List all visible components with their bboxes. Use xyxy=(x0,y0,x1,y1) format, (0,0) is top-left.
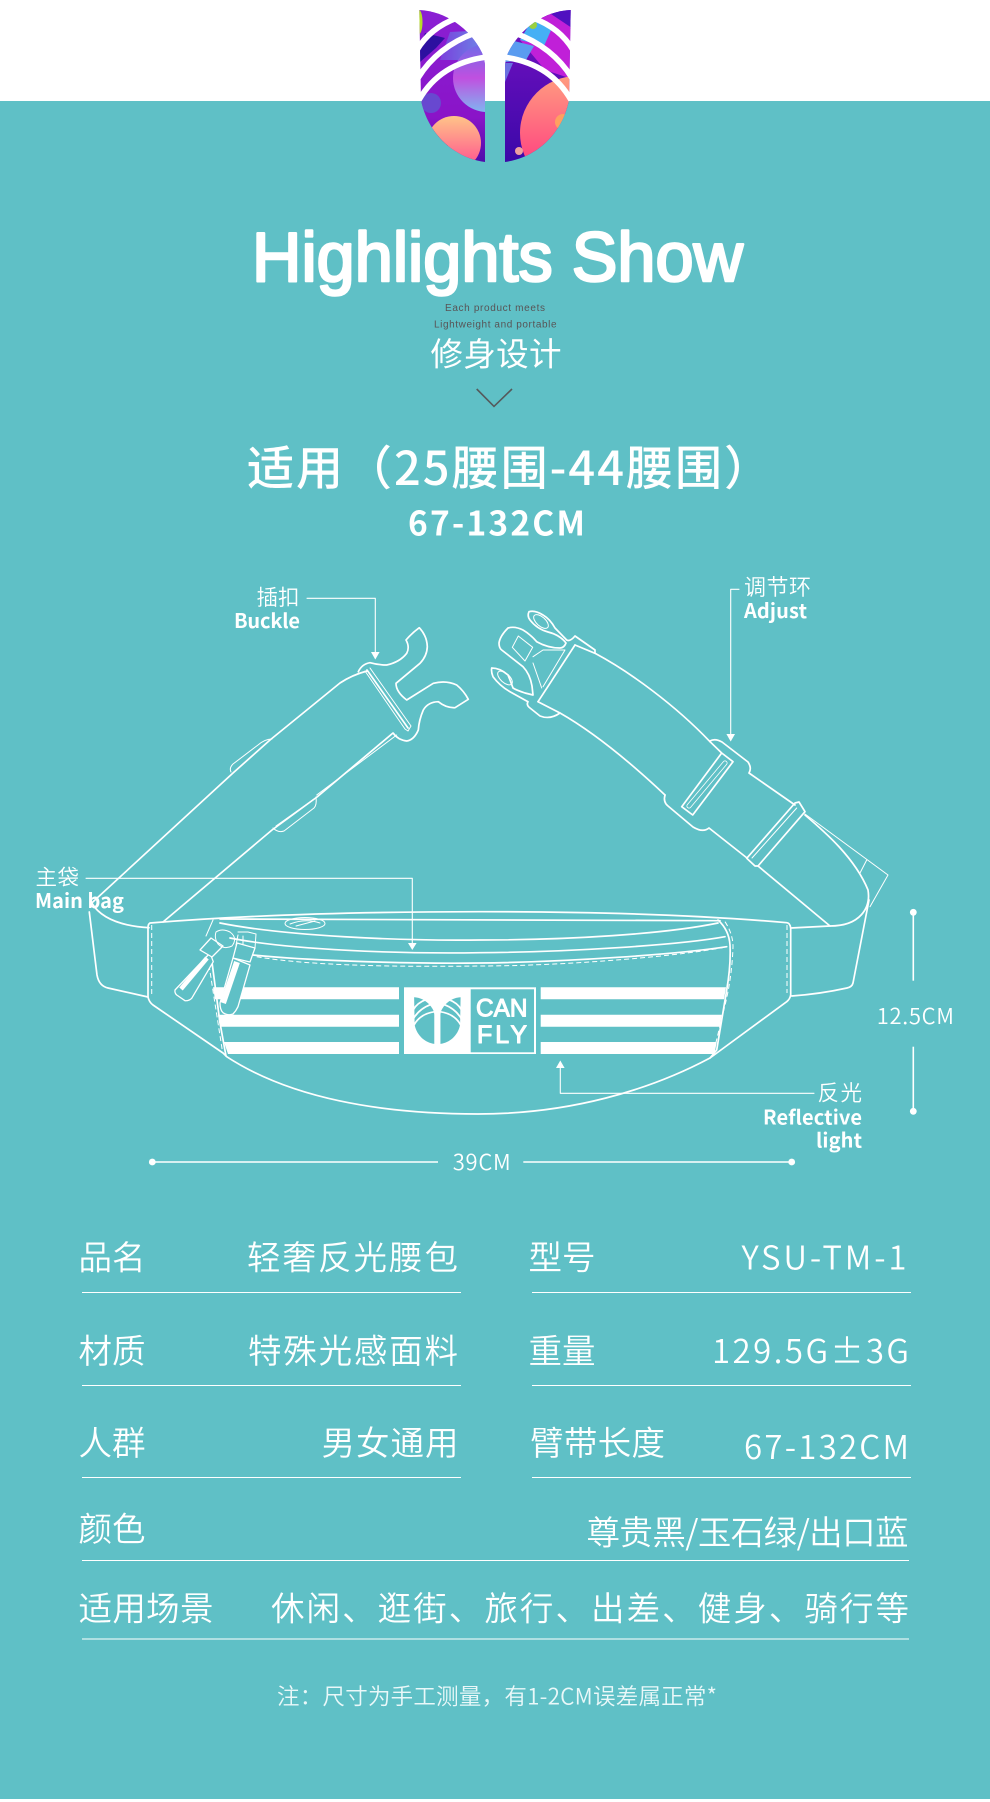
spec row: product name: 轻奢反光腰包 xyxy=(247,1230,458,1280)
callout: adjust: Adjust xyxy=(743,595,808,624)
spec row: colours: 尊贵黑/玉石绿/出口蓝 xyxy=(586,1506,908,1554)
spec row: product name: 品名 xyxy=(78,1230,146,1280)
spec row: strap length: 臂带长度 xyxy=(530,1416,665,1465)
spec row: weight: 重量 xyxy=(528,1324,596,1373)
spec row: product name xyxy=(78,1230,461,1292)
left buckle xyxy=(358,628,468,741)
icon: brand logo xyxy=(419,10,571,162)
brand patch xyxy=(404,987,536,1054)
spec row: weight xyxy=(528,1324,911,1386)
spec row: use cases: 适用场景 xyxy=(78,1582,214,1630)
callout: reflective light: light xyxy=(816,1125,863,1154)
subtitle: each product meets: Each product meets xyxy=(445,303,545,314)
subtitle: each product meets: Lightweight and portable xyxy=(434,320,557,330)
spec row: strap length xyxy=(530,1416,911,1478)
spec row: weight: 129.5G±3G xyxy=(712,1325,909,1373)
zipper pulls xyxy=(175,920,256,1015)
left strap xyxy=(89,671,397,997)
spec row: material: 材质 xyxy=(78,1324,146,1373)
spec row: model: YSU-TM-1 xyxy=(742,1232,906,1280)
subtitle: each product meets xyxy=(434,303,557,330)
spec row: audience: 人群 xyxy=(78,1416,146,1465)
reflective stripes xyxy=(213,987,726,1054)
spec table xyxy=(78,1230,911,1639)
bag body xyxy=(148,912,791,1114)
callout: reflective light: 反光 xyxy=(818,1076,862,1108)
callout: buckle: 插扣 xyxy=(256,581,300,612)
icon: chevron down xyxy=(477,389,512,406)
callout: buckle: Buckle xyxy=(234,605,300,634)
dimension: height: 12.5CM xyxy=(877,999,954,1031)
callout: reflective light xyxy=(556,1060,863,1154)
spec row: strap length: 67-132CM xyxy=(744,1421,909,1469)
footnote: 注：尺寸为手工测量，有1-2CM误差属正常* xyxy=(277,1680,717,1712)
callout: main bag: Main bag xyxy=(35,885,124,914)
callout: reflective light: Reflective xyxy=(763,1101,862,1130)
heading: centimetre range: 67-132CM xyxy=(408,497,585,546)
callout: buckle xyxy=(234,581,380,660)
callout: adjust: 调节环 xyxy=(744,570,811,602)
spec row: model xyxy=(528,1230,911,1292)
spec row: use cases: 休闲、逛街、旅行、出差、健身、骑行等 xyxy=(271,1582,909,1630)
diagram: waist bag line drawing xyxy=(89,611,888,1114)
brand patch: FLY xyxy=(477,1021,527,1049)
heading: waist range: 适用（25腰围-44腰围） xyxy=(247,430,771,499)
spec row: colours: 颜色 xyxy=(78,1502,146,1551)
dimension: width xyxy=(149,1145,795,1177)
spec row: material: 特殊光感面料 xyxy=(248,1324,458,1373)
callout: adjust xyxy=(726,570,811,742)
spec row: audience: 男女通用 xyxy=(322,1416,458,1465)
callout: main bag xyxy=(35,861,417,950)
spec row: use cases xyxy=(78,1582,909,1639)
dimension: width: 39CM xyxy=(453,1145,511,1177)
spec row: audience xyxy=(78,1416,461,1478)
right buckle xyxy=(492,611,595,717)
title: Highlights Show: Highlights Show xyxy=(252,218,743,296)
spec row: colours xyxy=(78,1502,909,1560)
callout: main bag: 主袋 xyxy=(36,861,79,892)
right strap with adjuster xyxy=(538,645,888,996)
spec row: model: 型号 xyxy=(528,1230,596,1280)
spec row: material xyxy=(78,1324,461,1386)
brand patch: CAN xyxy=(476,995,528,1023)
dimension: height xyxy=(877,909,954,1115)
pouch side seams xyxy=(209,920,733,1058)
heading: slim design: 修身设计 xyxy=(430,328,562,376)
